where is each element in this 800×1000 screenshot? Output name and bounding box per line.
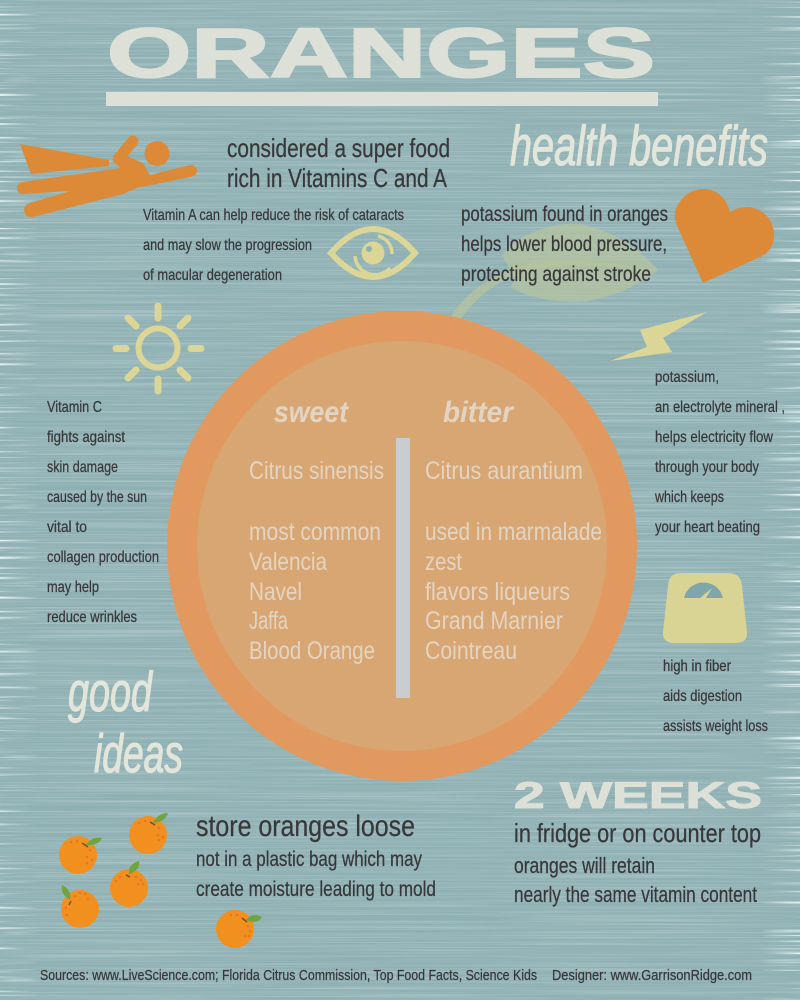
text: potassium electrolyte: through your body <box>655 459 759 476</box>
panel: sweet oranges: most common <box>249 518 381 546</box>
text: super food: rich in Vitamins C and A <box>227 163 448 193</box>
title: ORANGES <box>107 14 655 92</box>
text: store oranges loose <box>196 810 436 901</box>
panel: sweet oranges: Navel <box>249 578 302 606</box>
text: potassium blood pressure: protecting against stroke <box>461 263 651 286</box>
panel: sweet oranges: Valencia <box>249 548 327 576</box>
text: potassium electrolyte: your heart beating <box>655 519 760 536</box>
text: super food: considered a super food <box>227 133 450 163</box>
icon: orange 1 <box>59 836 102 874</box>
heading: good ideas <box>68 660 183 784</box>
text: storage duration <box>514 818 761 907</box>
text: sources: Sources: www.LiveScience.com; Florida Citrus Commission, Top Food Facts, Science Kids <box>40 967 537 984</box>
text: fiber: assists weight loss <box>663 718 768 735</box>
panel: sweet oranges: sweet <box>274 396 350 429</box>
text: fiber: high in fiber <box>663 658 732 675</box>
panel: bitter oranges: bitter <box>443 396 515 429</box>
text: potassium blood pressure <box>461 203 668 286</box>
text: vitamin C: skin damage <box>47 459 118 476</box>
text: potassium electrolyte <box>654 369 785 536</box>
orange leaf behind text <box>443 224 658 330</box>
title <box>106 14 658 106</box>
icon: heart <box>675 189 774 283</box>
text: potassium electrolyte: which keeps <box>654 489 724 506</box>
icon: orange 2 <box>129 813 168 854</box>
icon: orange 4 <box>61 885 99 928</box>
text: store oranges loose: create moisture leading to mold <box>196 878 436 901</box>
text: super food <box>227 133 450 193</box>
text: fiber <box>663 658 768 735</box>
heading: good ideas: ideas <box>94 724 183 784</box>
panel: bitter oranges: Cointreau <box>425 637 517 665</box>
icon: orange 3 <box>110 861 148 907</box>
panel: bitter oranges: Grand Marnier <box>425 607 563 635</box>
panel: bitter oranges: used in marmalade <box>425 518 602 546</box>
text: fiber: aids digestion <box>663 688 742 705</box>
panel: bitter oranges: zest <box>425 548 462 576</box>
heading: good ideas: good <box>68 660 153 723</box>
text: vitamin A: Vitamin A can help reduce the risk of cataracts <box>143 207 404 224</box>
text: store oranges loose: not in a plastic bag which may <box>196 848 422 871</box>
panel: sweet oranges: Blood Orange <box>249 637 375 665</box>
text: vitamin C: collagen production <box>47 549 159 566</box>
icon: lightning bolt <box>610 312 707 361</box>
panel: bitter oranges <box>425 396 602 665</box>
panel: sweet oranges <box>249 396 384 665</box>
text: potassium blood pressure: potassium found in oranges <box>461 203 668 226</box>
panel: bitter oranges: flavors liqueurs <box>425 578 570 606</box>
icon: weight scale <box>663 573 747 643</box>
text: vitamin C <box>47 399 159 626</box>
heading: 2 weeks: 2 WEEKS <box>514 775 762 816</box>
panel: bitter oranges: Citrus aurantium <box>425 457 583 485</box>
text: storage duration: oranges will retain <box>514 853 655 878</box>
text: vitamin C: fights against <box>47 429 125 446</box>
text: potassium blood pressure: helps lower blood pressure, <box>461 233 667 256</box>
text: potassium electrolyte: helps electricity flow <box>655 429 773 446</box>
text: vitamin C: may help <box>47 579 99 596</box>
text: vitamin C: reduce wrinkles <box>47 609 137 626</box>
icon: eye <box>331 229 415 277</box>
text: potassium electrolyte: potassium, <box>655 369 719 386</box>
text: vitamin C: Vitamin C <box>47 399 102 416</box>
text: sources: Designer: www.GarrisonRidge.com <box>552 967 752 984</box>
text: vitamin C: caused by the sun <box>47 489 147 506</box>
text: vitamin A: of macular degeneration <box>143 267 282 284</box>
text: store oranges loose: store oranges loose <box>196 810 415 843</box>
large orange circle <box>167 311 637 781</box>
icon: flying superhero <box>17 141 197 217</box>
text: vitamin A <box>143 207 404 284</box>
text: vitamin A: and may slow the progression <box>143 237 312 254</box>
panel: sweet oranges: Jaffa <box>249 607 288 635</box>
text: vitamin C: vital to <box>47 519 87 536</box>
panel: sweet oranges: Citrus sinensis <box>249 457 384 485</box>
icon: sun <box>116 306 201 391</box>
icon: orange 5 <box>216 910 262 948</box>
